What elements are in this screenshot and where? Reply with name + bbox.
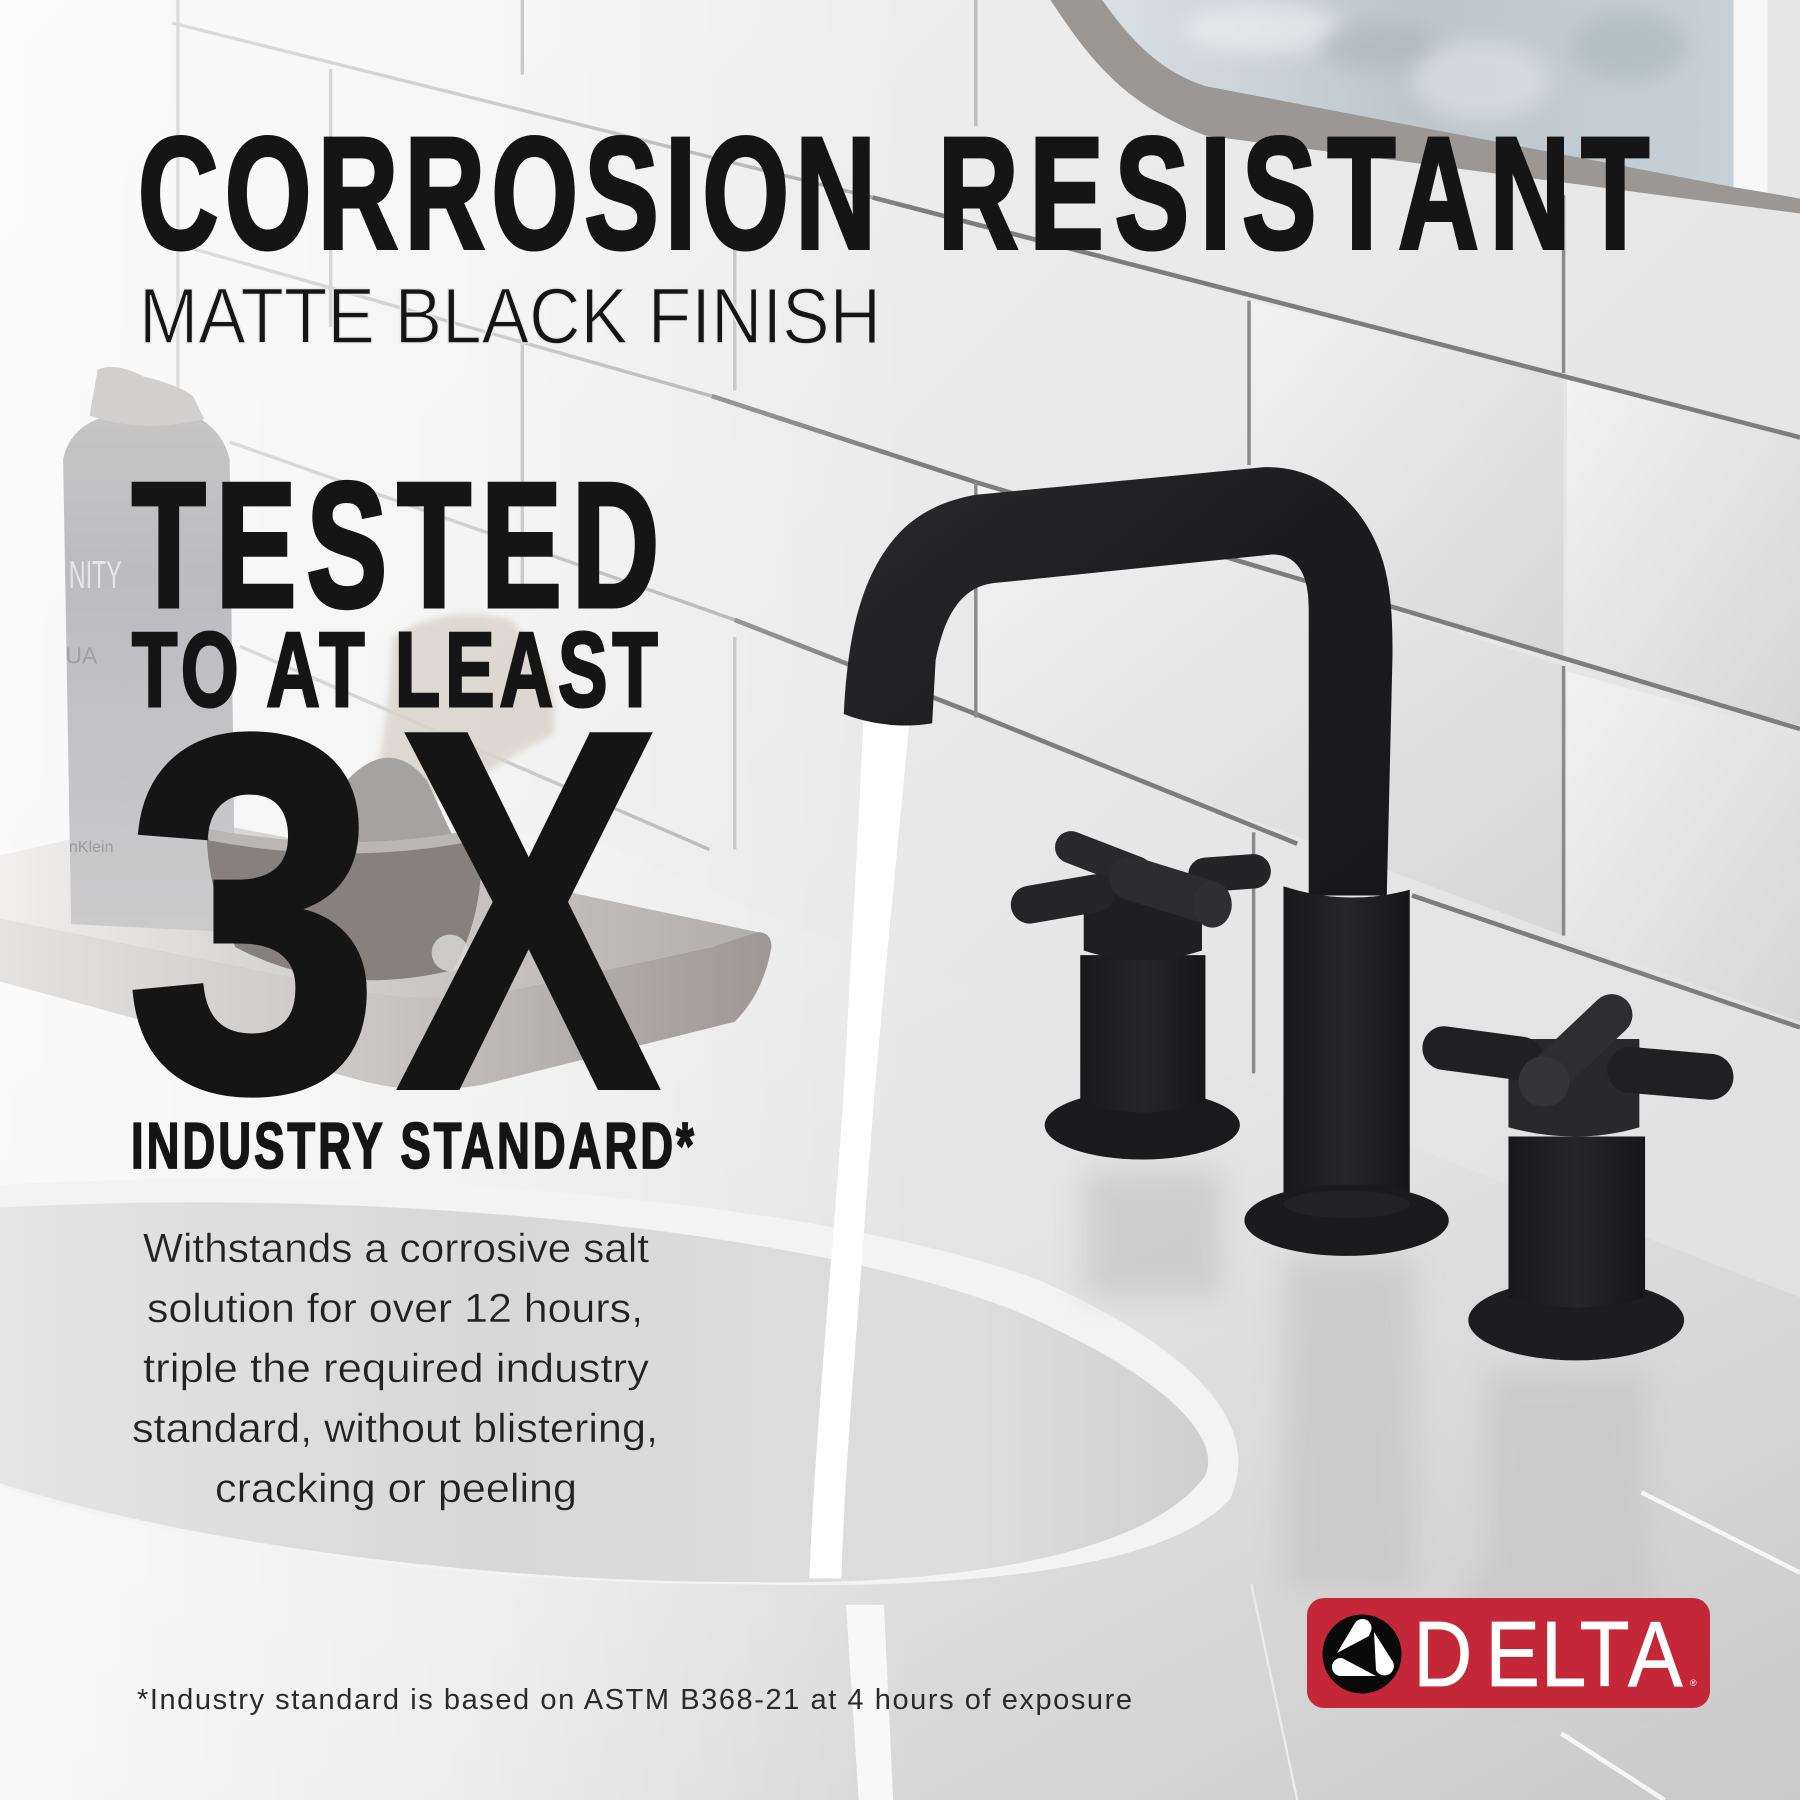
mirror — [1050, 0, 1800, 214]
bottle: UA — [65, 643, 98, 669]
big number: 3X: X — [394, 622, 665, 1199]
body text: solution for over 12 hours, — [147, 1285, 643, 1331]
marble veins — [1251, 1492, 1800, 1800]
big number: 3X — [126, 622, 665, 1199]
counter — [0, 832, 1800, 1800]
faucet spout and body — [844, 467, 1449, 1256]
water stream — [809, 721, 909, 1800]
bottle: NITY — [69, 554, 122, 597]
body text: cracking or peeling — [215, 1465, 577, 1511]
subhead: industry standard: INDUSTRY STANDARD* — [131, 1109, 694, 1182]
left white wash — [0, 0, 918, 1800]
Delta logo: DELTA — [1413, 1602, 1683, 1706]
body text: Withstands a corrosive salt — [143, 1225, 650, 1271]
left handle — [1030, 847, 1254, 1159]
body text: triple the required industry — [143, 1345, 650, 1391]
bottle — [63, 367, 235, 932]
headline: tested: TESTED — [132, 447, 659, 645]
headline: to at least: TO AT LEAST — [132, 611, 658, 729]
title: RESISTANT — [938, 105, 1649, 283]
tray — [0, 827, 771, 1089]
bottle: nKlein — [69, 838, 114, 856]
Delta logo: ® — [1690, 1678, 1697, 1688]
sink basin — [0, 1179, 1238, 1585]
shaving brush — [379, 614, 555, 804]
body text: standard, without blistering, — [132, 1405, 658, 1451]
Delta logo — [1307, 1598, 1710, 1708]
body text — [132, 1225, 658, 1511]
footnote: *Industry standard is based on ASTM B368-21 at 4 hours of exposure — [137, 1684, 1132, 1716]
big number: 3X: 3 — [126, 630, 380, 1195]
right handle — [1444, 1015, 1711, 1360]
subtitle: MATTE BLACK FINISH — [139, 271, 881, 360]
shaving bowl — [207, 758, 481, 980]
faucet reflections on counter — [1085, 1171, 1659, 1693]
title — [138, 105, 1649, 283]
title: CORROSION — [138, 105, 876, 283]
